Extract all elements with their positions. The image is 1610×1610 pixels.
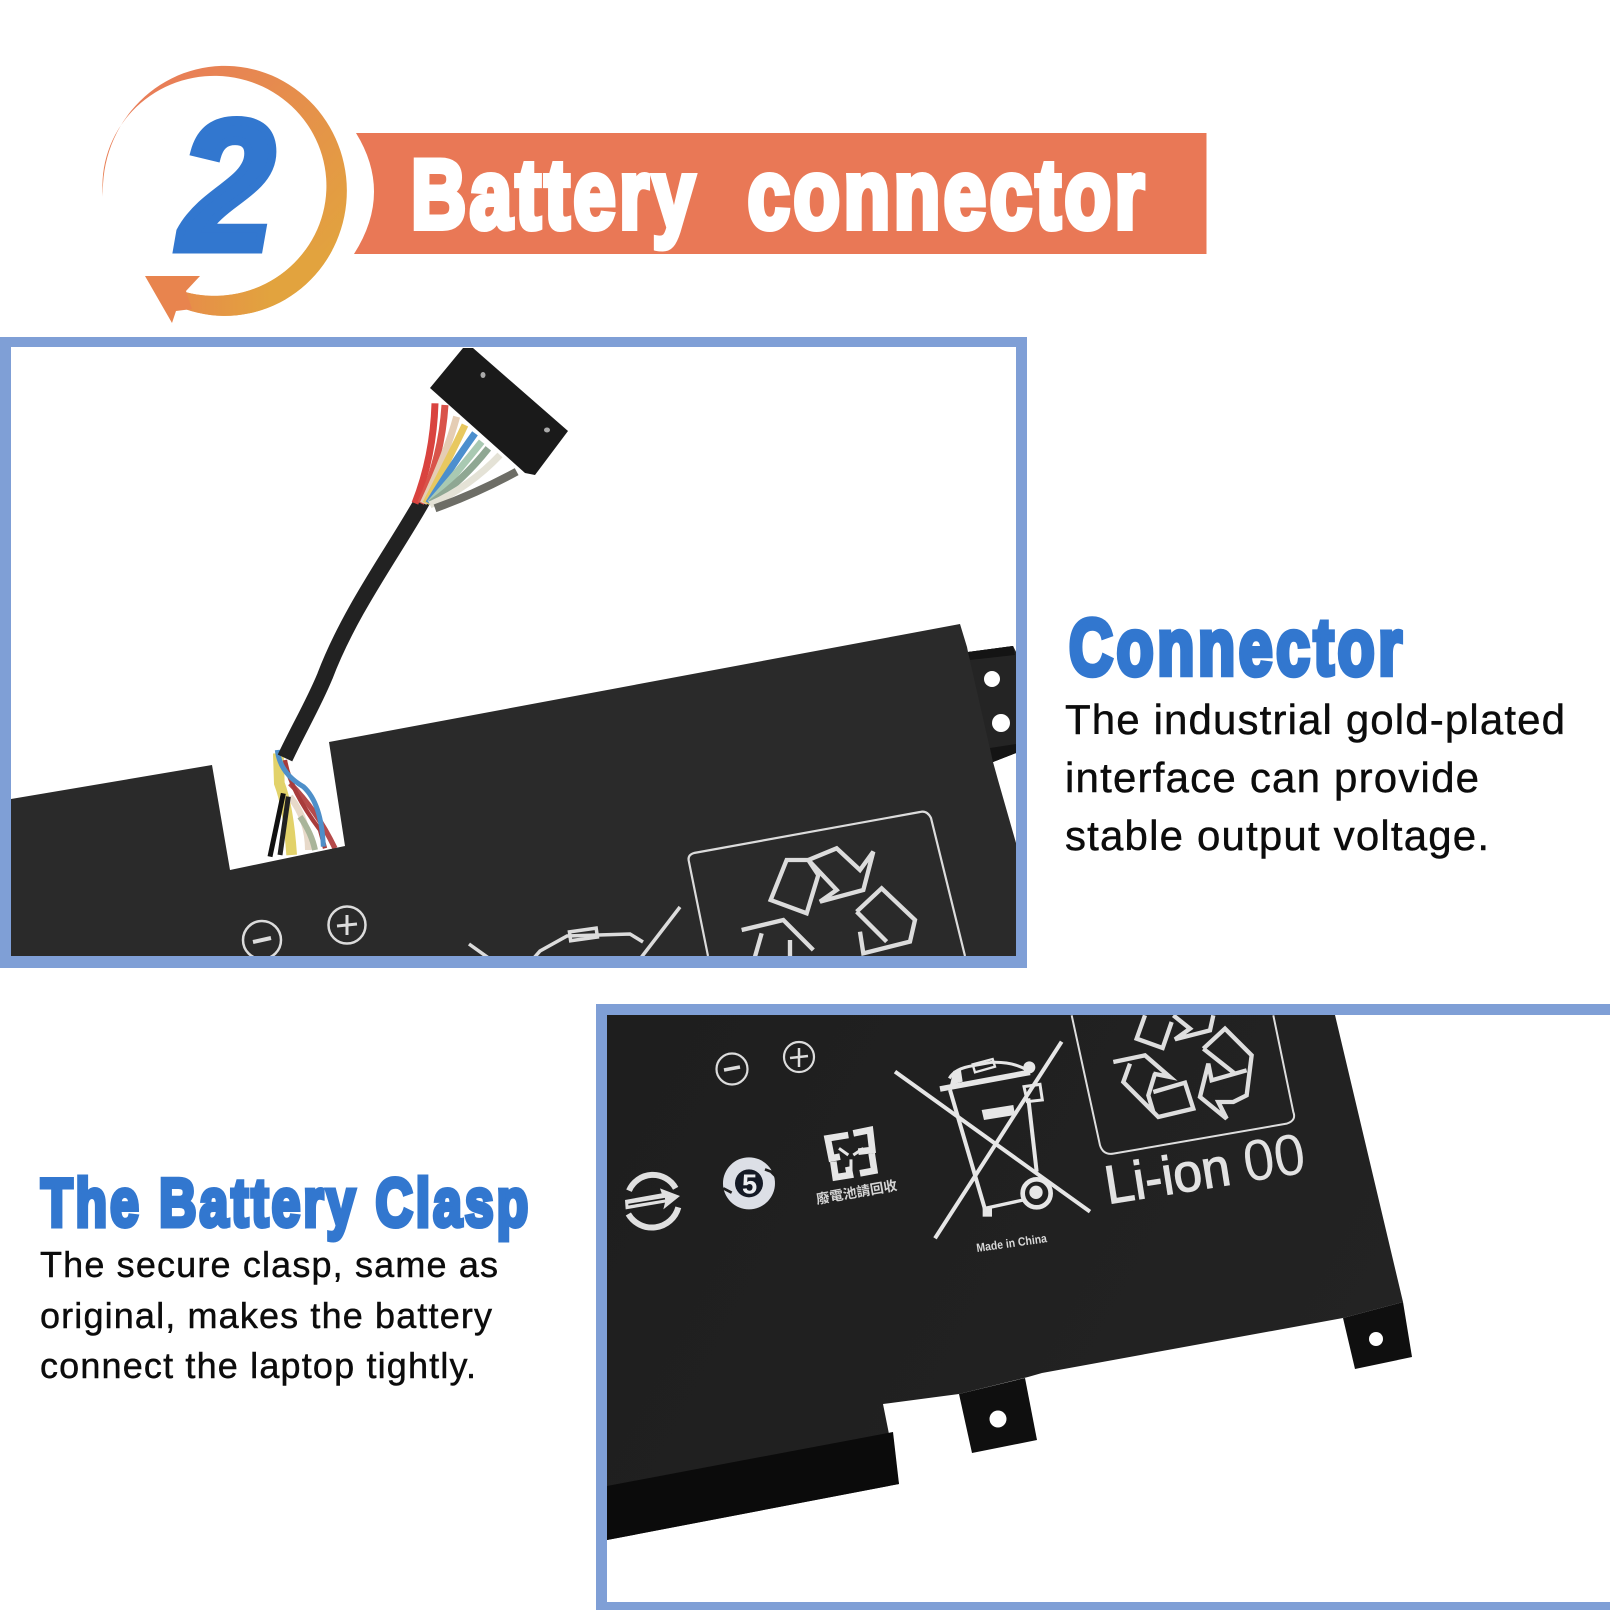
mounting tab [968, 646, 1016, 762]
clasp tab centre [959, 1378, 1037, 1453]
connector body text: interface can provide [1065, 754, 1479, 801]
battery recycling caption: 廢電池請回收 [815, 1177, 899, 1207]
5-year symbol: 5 [742, 1168, 757, 1199]
number badge [102, 66, 347, 323]
battery underside illustration [607, 1015, 1412, 1540]
battery body [607, 1015, 1403, 1540]
5-year symbol [723, 1157, 777, 1209]
title banner [354, 133, 1206, 254]
connector heading: Connector [1069, 604, 1402, 693]
recycling label [689, 812, 965, 957]
panel: clasp photo [596, 1004, 1610, 1610]
clasp body text [40, 1244, 498, 1386]
battery body [11, 624, 1016, 956]
polarity symbols [243, 906, 366, 959]
clasp heading: The Battery Clasp [41, 1164, 528, 1241]
clasp body text: connect the laptop tightly. [40, 1345, 476, 1386]
lower wires [270, 750, 335, 857]
crossed-out bin top [469, 907, 680, 959]
recycling label [1072, 1015, 1294, 1154]
title text: Battery connector [411, 139, 1144, 249]
made in china label: Made in China [975, 1231, 1048, 1255]
polarity symbols [716, 1042, 814, 1084]
circular arrow ring [102, 66, 347, 323]
battery recycling mark [828, 1130, 874, 1177]
certification symbol [625, 1175, 680, 1228]
panel: connector photo [0, 337, 1027, 968]
li-ion label: Li-ion 00 [1100, 1121, 1310, 1217]
upper wires [415, 403, 517, 508]
cable [285, 498, 424, 758]
number 2: 2 [177, 82, 274, 288]
connector body text [1065, 696, 1565, 859]
connector body text: The industrial gold-plated [1065, 696, 1565, 743]
clasp tab right [1343, 1302, 1412, 1369]
clasp body text: original, makes the battery [40, 1295, 492, 1336]
connector plug [430, 348, 568, 475]
clasp body text: The secure clasp, same as [40, 1244, 498, 1285]
dark edge strip [607, 1432, 899, 1540]
connector body text: stable output voltage. [1065, 812, 1489, 859]
battery photo illustration [11, 348, 1016, 959]
connector description [1065, 604, 1565, 859]
clasp description [40, 1164, 528, 1386]
crossed-out bin icon [895, 1042, 1090, 1238]
